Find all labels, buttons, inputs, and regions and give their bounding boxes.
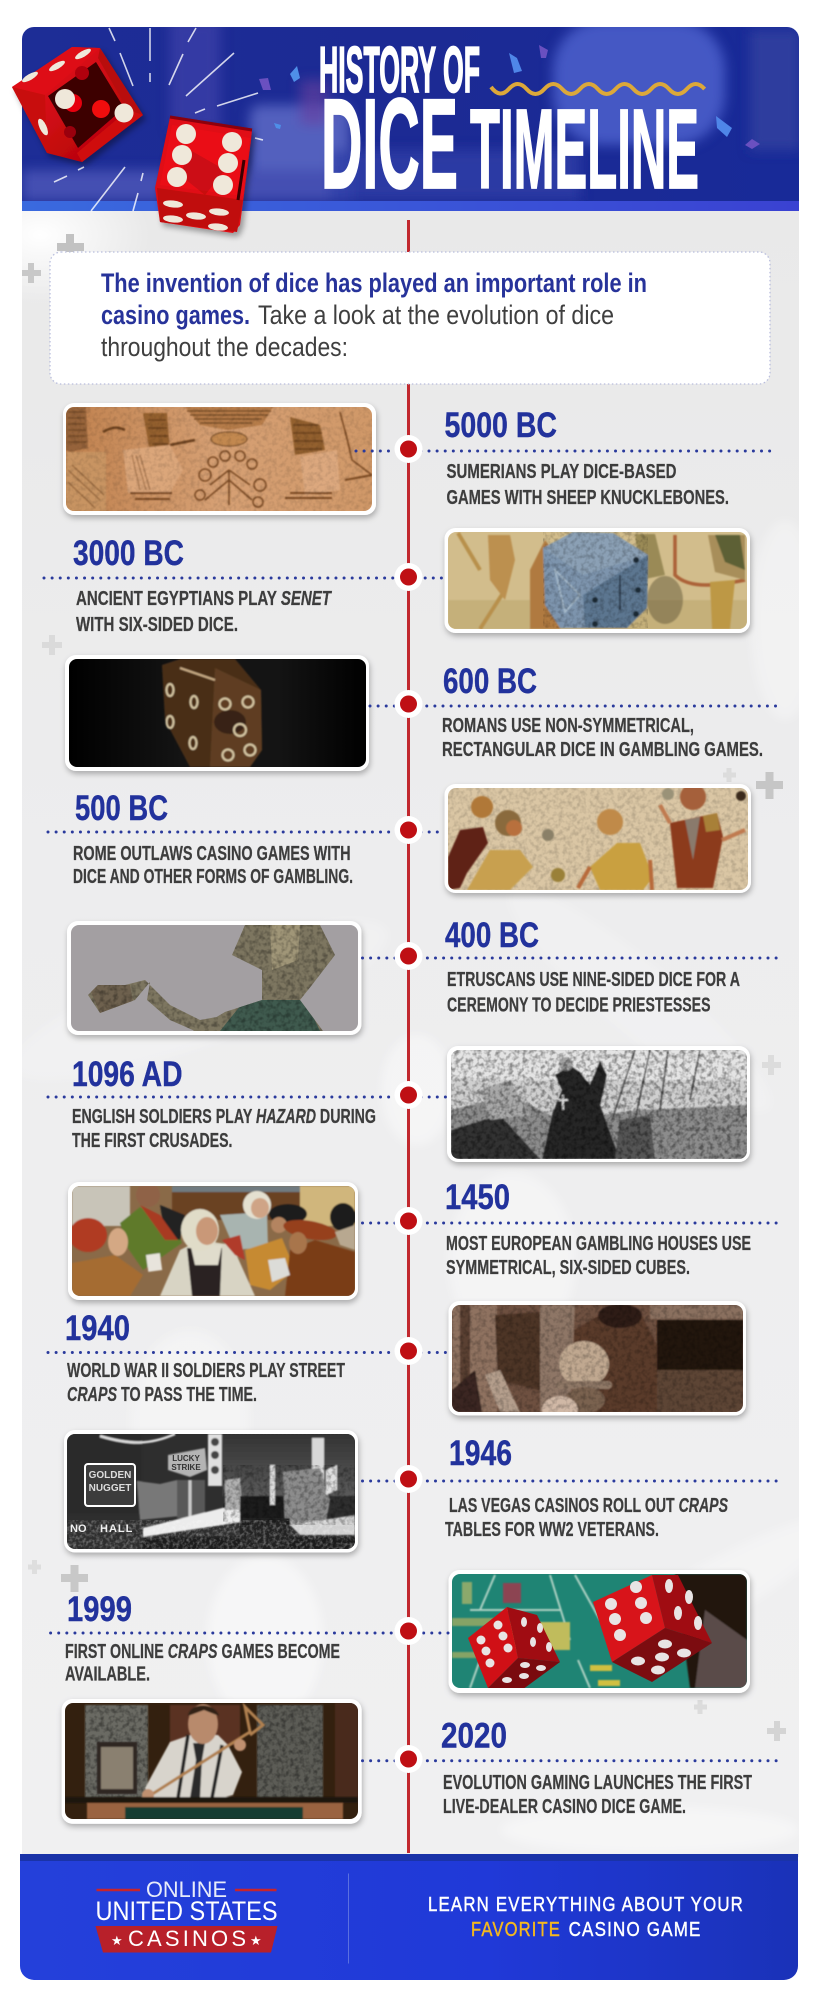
- entry: 600 BC: [65, 655, 779, 771]
- entry: 500 BC: [48, 784, 751, 893]
- entry: 1946: [64, 1430, 780, 1552]
- neon sign: Golden Nugget: GOLDEN: [89, 1470, 131, 1481]
- entry: 1096 AD: [48, 1046, 750, 1162]
- description: SYMMETRICAL, SIX-SIDED CUBES.: [446, 1257, 690, 1279]
- panel: intro text box: throughout the decades:: [101, 332, 348, 362]
- entry: 1999: [51, 1570, 750, 1695]
- node: [394, 1081, 422, 1109]
- description: [447, 969, 740, 1016]
- description: [73, 843, 353, 888]
- entry: 400 BC: [67, 916, 780, 1035]
- photo: Las Vegas street: [64, 1430, 358, 1552]
- timeline spine: [407, 220, 410, 1853]
- description: [443, 1772, 752, 1818]
- description: CEREMONY TO DECIDE PRIESTESSES: [447, 994, 710, 1016]
- node: [394, 435, 422, 463]
- icon: red die one: [12, 47, 143, 162]
- panel: intro text box: casino games.: [101, 300, 250, 330]
- description: [442, 715, 763, 761]
- dotted connector: [48, 830, 440, 834]
- big die: [593, 1575, 712, 1682]
- year: 1450: [445, 1178, 510, 1217]
- confetti: [259, 45, 760, 149]
- logo: Online United States Casinos: [96, 1877, 278, 1952]
- description: [72, 1106, 376, 1152]
- photo: live dealer: [62, 1699, 362, 1824]
- title: HISTORY OF: [319, 33, 480, 106]
- description: WORLD WAR II SOLDIERS PLAY STREET: [67, 1360, 345, 1382]
- footer call to action: CASINO GAME: [569, 1919, 702, 1941]
- description: ENGLISH SOLDIERS PLAY HAZARD DURING: [72, 1106, 376, 1128]
- description: THE FIRST CRUSADES.: [72, 1130, 232, 1152]
- year: 400 BC: [445, 916, 539, 955]
- dotted connector: [356, 450, 775, 452]
- description: FIRST ONLINE CRAPS GAMES BECOME: [65, 1641, 340, 1663]
- panel: intro text box: Take a look at the evolution of dice: [258, 300, 614, 330]
- dotted connector: [362, 1222, 780, 1224]
- description: [446, 461, 729, 509]
- decorative plus marks: [22, 234, 786, 1741]
- entry: 2020: [62, 1699, 780, 1824]
- dotted connector: [362, 1480, 780, 1482]
- dotted connector: [362, 1759, 780, 1762]
- logo: Online United States Casinos: ★: [111, 1933, 123, 1948]
- entry: 5000 BC: [63, 403, 775, 515]
- node: [394, 1745, 422, 1773]
- year: 1999: [67, 1590, 132, 1629]
- photo: Roman die: [65, 655, 369, 771]
- entry: 1940: [48, 1301, 746, 1424]
- description: [446, 1233, 751, 1279]
- panel: intro text box: [50, 252, 770, 384]
- title: [319, 33, 699, 216]
- photo: Las Vegas street: HALL: [100, 1523, 133, 1535]
- year: 500 BC: [75, 789, 168, 828]
- node: [394, 1207, 422, 1235]
- description: [76, 588, 332, 636]
- footer call to action: FAVORITE: [471, 1919, 561, 1941]
- dotted connector: [370, 704, 779, 708]
- spark lines: [54, 28, 263, 211]
- description: ANCIENT EGYPTIANS PLAY SENET: [76, 588, 332, 610]
- year: 600 BC: [443, 662, 537, 701]
- panel: footer: [20, 1854, 798, 1980]
- logo: Online United States Casinos: UNITED STATES: [96, 1896, 278, 1926]
- node: [394, 1617, 422, 1645]
- year: 2020: [441, 1716, 507, 1756]
- description: CRAPS TO PASS THE TIME.: [67, 1384, 257, 1406]
- neon sign: Lucky Strike: STRIKE: [171, 1463, 201, 1472]
- node: [394, 1465, 422, 1493]
- description: SUMERIANS PLAY DICE-BASED: [446, 461, 676, 483]
- photo: WWII trench soldiers: [448, 1301, 746, 1424]
- year: 1940: [65, 1309, 130, 1348]
- description: ROME OUTLAWS CASINO GAMES WITH: [73, 843, 350, 865]
- description: [67, 1360, 345, 1406]
- photo: online craps dice: [448, 1570, 750, 1695]
- year: 1946: [449, 1434, 512, 1473]
- node: [394, 1337, 422, 1365]
- photo: Egyptian die: [444, 528, 750, 633]
- neon sign: Lucky Strike: LUCKY: [172, 1454, 200, 1463]
- dotted connector: [48, 1351, 448, 1354]
- dotted connector: [44, 576, 443, 580]
- title: DICE: [321, 73, 458, 216]
- neon text: NO: [70, 1523, 87, 1535]
- neon sign: Golden Nugget: [85, 1464, 135, 1506]
- small die: [468, 1607, 560, 1695]
- logo: Online United States Casinos: ★: [250, 1933, 262, 1948]
- entry: 3000 BC: [44, 528, 750, 636]
- photo: Etruscan statue: [67, 921, 362, 1035]
- panel: header banner: [12, 20, 800, 233]
- node: [394, 690, 422, 718]
- node: [394, 942, 422, 970]
- panel: intro text box: The invention of dice has played an important role in: [101, 268, 647, 298]
- description: LIVE-DEALER CASINO DICE GAME.: [443, 1796, 686, 1818]
- neon sign: Golden Nugget: NUGGET: [89, 1483, 131, 1494]
- logo: Online United States Casinos: ONLINE: [146, 1877, 227, 1902]
- dotted connector: [362, 956, 780, 960]
- year: 3000 BC: [73, 534, 184, 573]
- node: [394, 563, 422, 591]
- icon: red die two: [155, 117, 252, 233]
- footer call to action: LEARN EVERYTHING ABOUT YOUR: [428, 1894, 744, 1916]
- neon sign: Lucky Strike: [172, 1455, 200, 1470]
- description: [65, 1641, 340, 1686]
- description: LAS VEGAS CASINOS ROLL OUT CRAPS: [449, 1495, 728, 1517]
- description: AVAILABLE.: [65, 1664, 150, 1686]
- node: [394, 816, 422, 844]
- description: WITH SIX-SIDED DICE.: [76, 614, 238, 636]
- photo: crusades engraving: [447, 1046, 750, 1162]
- year: 5000 BC: [444, 406, 557, 445]
- year: 1096 AD: [72, 1055, 182, 1094]
- description: ROMANS USE NON-SYMMETRICAL,: [442, 715, 694, 737]
- description: TABLES FOR WW2 VETERANS.: [445, 1519, 659, 1541]
- logo: Online United States Casinos: CASINOS: [128, 1926, 246, 1951]
- gold wave: [491, 84, 705, 94]
- description: [445, 1495, 728, 1541]
- entry: 1450: [68, 1178, 780, 1300]
- footer call to action: [428, 1894, 744, 1941]
- description: DICE AND OTHER FORMS OF GAMBLING.: [73, 866, 353, 888]
- photo: Renaissance card players: [68, 1182, 358, 1300]
- photo: Roman fresco: [444, 784, 751, 893]
- dotted connector: [51, 1632, 449, 1634]
- dotted connector: [48, 1096, 448, 1098]
- photo: Sumerian relief: [63, 403, 376, 515]
- header bokeh background: [22, 20, 800, 201]
